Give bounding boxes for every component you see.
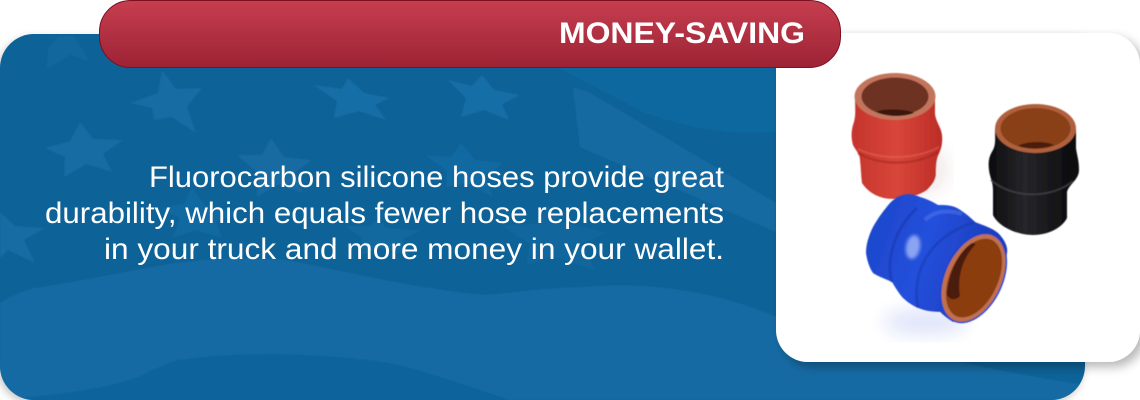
heading text: MONEY-SAVING bbox=[559, 17, 805, 50]
body text bbox=[45, 161, 724, 266]
body text: durability, which equals fewer hose replacements bbox=[45, 197, 724, 230]
panel: product photo card bbox=[776, 33, 1140, 362]
body text: Fluorocarbon silicone hoses provide great bbox=[149, 161, 724, 194]
icon: black silicone hose bbox=[989, 104, 1079, 235]
icon: flag stars bbox=[0, 72, 518, 262]
heading banner bbox=[100, 0, 840, 68]
icon: red silicone hose bbox=[852, 73, 949, 199]
body text: in your truck and more money in your wallet. bbox=[104, 233, 724, 266]
icon: blue silicone hose bbox=[866, 194, 1021, 335]
